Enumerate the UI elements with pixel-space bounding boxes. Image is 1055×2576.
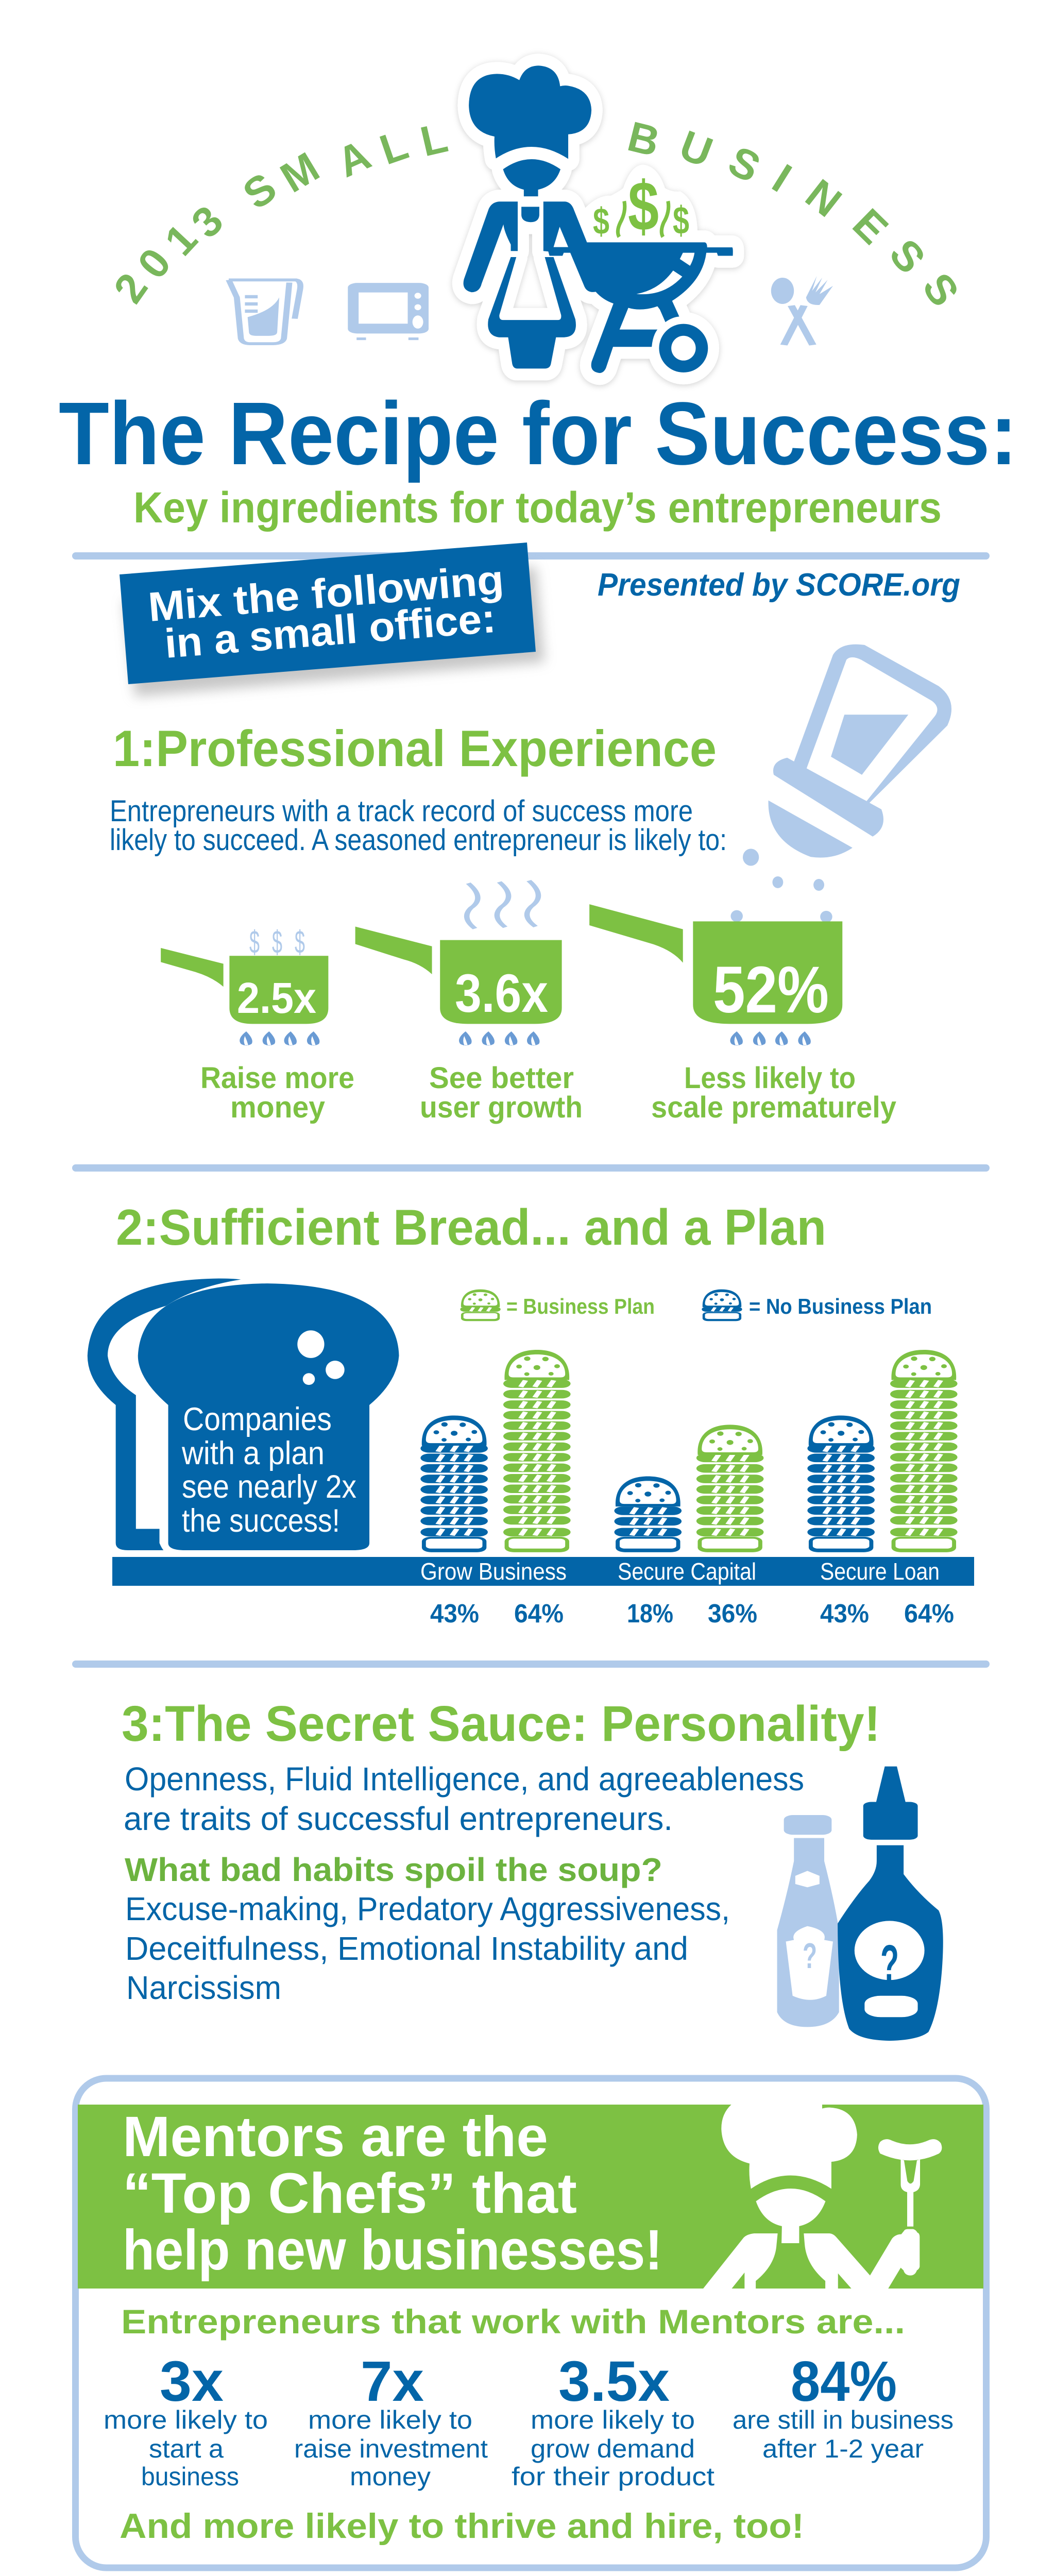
paragraph: traits: Openness, Fluid Intelligence, and agreeableness: [125, 1760, 804, 1798]
icon: spoon and fork: [771, 276, 833, 345]
icon: chef at the grill: [464, 65, 733, 373]
arched heading: 2013 Small Business: E: [844, 200, 897, 253]
chart values: 64%: [514, 1599, 564, 1628]
banner: mentors headline: help new businesses!: [123, 2218, 662, 2282]
arched heading: 2013 Small Business: 0: [129, 240, 180, 287]
chart values: 64%: [904, 1599, 954, 1628]
stat: 84%: [733, 2350, 954, 2463]
arched heading: 2013 Small Business: [105, 113, 968, 315]
arched heading: 2013 Small Business: S: [880, 230, 934, 282]
arched heading: 2013 Small Business: B: [623, 113, 664, 166]
arched heading: 2013 Small Business: L: [416, 114, 452, 165]
stat: 7x: raise investment: [294, 2434, 488, 2463]
icon: white chef with fork: [703, 2105, 942, 2289]
icon: dark sauce bottle: [838, 1767, 943, 2041]
stat: 7x: 7x: [361, 2350, 424, 2413]
stat: 84%: 84%: [791, 2350, 897, 2413]
heading: sufficient bread: 2:Sufficient Bread... and a Plan: [116, 1199, 826, 1256]
chef sticker outline: [464, 65, 733, 373]
divider: [72, 1660, 990, 1668]
arched heading: 2013 Small Business: 2: [105, 265, 157, 311]
chart: burger stacks: [420, 1350, 958, 1552]
arched heading: 2013 Small Business: I: [764, 155, 799, 201]
pot: better user growth: See better: [429, 1061, 574, 1095]
pot: less likely to scale prematurely: scale prematurely: [651, 1091, 896, 1124]
legend: no business plan: = No Business Plan: [749, 1294, 932, 1318]
panel: mentors: [75, 2078, 986, 2568]
icon: bread slices with callout: see nearly 2x: [182, 1469, 356, 1505]
icon: dollar-sign smoke: [593, 167, 689, 245]
subheading: entrepreneurs with mentors: Entrepreneurs that work with Mentors are...: [121, 2302, 905, 2341]
pot: raise more money: $: [272, 925, 282, 960]
chart axis bar with labels: [112, 1557, 974, 1586]
icon: light sauce bottle: ?: [803, 1936, 817, 1976]
pot: less likely to scale prematurely: [589, 904, 896, 1124]
arched heading: 2013 Small Business: S: [721, 137, 768, 192]
closing line: And more likely to thrive and hire, too!: [120, 2506, 804, 2546]
arched heading: 2013 Small Business: A: [330, 131, 378, 187]
divider: [72, 552, 990, 560]
stat: 84%: after 1-2 year: [762, 2434, 924, 2463]
paragraph: experience intro: Entrepreneurs with a track record of success more: [110, 794, 693, 828]
icon: dollar-sign smoke: $: [673, 199, 689, 243]
banner: mix the following: [120, 543, 544, 697]
icon: bread slices with callout: [88, 1279, 399, 1550]
arched heading: 2013 Small Business: 1: [156, 215, 207, 264]
icon: bread slices with callout: with a plan: [181, 1435, 325, 1471]
pot: better user growth: 3.6x: [455, 963, 548, 1024]
paragraph: bad habits list: Narcissism: [126, 1969, 281, 2006]
stat: 3x: [104, 2350, 268, 2491]
banner: mix the following: in a small office:: [163, 595, 497, 667]
arched heading: 2013 Small Business: L: [374, 121, 414, 174]
banner: mix the following: Mix the following: [146, 556, 505, 630]
chart axis bar with labels: Grow Business: [420, 1558, 567, 1585]
pot: raise more money: $: [249, 925, 260, 960]
pot: raise more money: Raise more: [200, 1061, 354, 1095]
chart values: 43%: [430, 1599, 479, 1628]
pot: better user growth: user growth: [420, 1091, 583, 1124]
pot: less likely to scale prematurely: Less likely to: [684, 1061, 856, 1095]
chart values: [430, 1599, 954, 1628]
pot: raise more money: [161, 925, 354, 1124]
stat: 3.5x: [512, 2350, 714, 2491]
chart axis bar with labels: Secure Capital: [618, 1558, 756, 1585]
stat: 3x: more likely to: [104, 2405, 268, 2434]
stat: 7x: [294, 2350, 488, 2491]
subheading: bad habits: What bad habits spoil the soup?: [125, 1851, 662, 1888]
paragraph: bad habits list: Deceitfulness, Emotional Instability and: [125, 1930, 688, 1967]
icon: dollar-sign smoke: $: [593, 201, 609, 242]
paragraph: traits: are traits of successful entrepreneurs.: [124, 1800, 673, 1837]
stat: 3.5x: more likely to: [531, 2405, 695, 2434]
chart values: 36%: [708, 1599, 757, 1628]
arched heading: 2013 Small Business: S: [913, 265, 968, 315]
icon: dollar-sign smoke: $: [628, 167, 659, 245]
icon: light sauce bottle: [777, 1815, 839, 2027]
icon: bread slices with callout: the success!: [182, 1503, 340, 1539]
paragraph: experience intro: likely to succeed. A seasoned entrepreneur is likely to:: [110, 823, 727, 857]
stat: 84%: are still in business: [733, 2405, 954, 2434]
stat: 3x: start a: [149, 2434, 224, 2463]
banner: mentors headline: “Top Chefs” that: [123, 2162, 577, 2225]
paragraph: experience intro: [110, 794, 727, 857]
divider: [72, 1164, 990, 1172]
stat: 7x: money: [350, 2462, 431, 2491]
stat: 3x: business: [141, 2462, 239, 2491]
icon: microwave: [348, 283, 429, 340]
banner: mentors headline: [78, 2105, 983, 2289]
stat: 3.5x: for their product: [512, 2462, 714, 2491]
heading: secret sauce: 3:The Secret Sauce: Personality!: [122, 1696, 880, 1752]
pot: better user growth: [355, 880, 583, 1124]
chart values: 18%: [627, 1599, 673, 1628]
stat: 7x: more likely to: [308, 2405, 472, 2434]
legend: no business plan: [702, 1290, 932, 1321]
presented by: Presented by SCORE.org: [598, 567, 960, 603]
paragraph: bad habits list: Excuse-making, Predatory Aggressiveness,: [125, 1890, 730, 1927]
arched heading: 2013 Small Business: 3: [183, 197, 232, 247]
arched heading: 2013 Small Business: N: [797, 171, 850, 226]
paragraph: traits: [124, 1760, 804, 1837]
pot: less likely to scale prematurely: 52%: [713, 953, 829, 1027]
chart values: 43%: [820, 1599, 869, 1628]
paragraph: bad habits list: [125, 1890, 730, 2006]
arched heading: 2013 Small Business: S: [235, 164, 285, 218]
icon: bread slices with callout: Companies: [183, 1401, 332, 1437]
stat: 3.5x: 3.5x: [558, 2350, 670, 2413]
pot: raise more money: 2.5x: [237, 974, 316, 1022]
icon: measuring cup: [229, 280, 300, 344]
legend: business plan: = Business Plan: [506, 1294, 655, 1318]
icon: dark sauce bottle: ?: [880, 1935, 899, 1992]
subtitle: Key ingredients for today’s entrepreneurs: [133, 483, 942, 532]
heading: professional experience: 1:Professional Experience: [113, 720, 717, 777]
pot: raise more money: $: [295, 925, 305, 960]
icon: salt shaker: [730, 645, 951, 923]
arched heading: 2013 Small Business: U: [673, 122, 719, 176]
stat: 3.5x: grow demand: [531, 2434, 695, 2463]
legend: business plan: [460, 1290, 655, 1321]
arched heading: 2013 Small Business: M: [273, 144, 327, 202]
banner: mentors headline: Mentors are the: [123, 2105, 548, 2168]
pot: raise more money: money: [230, 1091, 325, 1124]
stat: 3x: 3x: [160, 2350, 224, 2413]
chart axis bar with labels: Secure Loan: [820, 1558, 940, 1585]
